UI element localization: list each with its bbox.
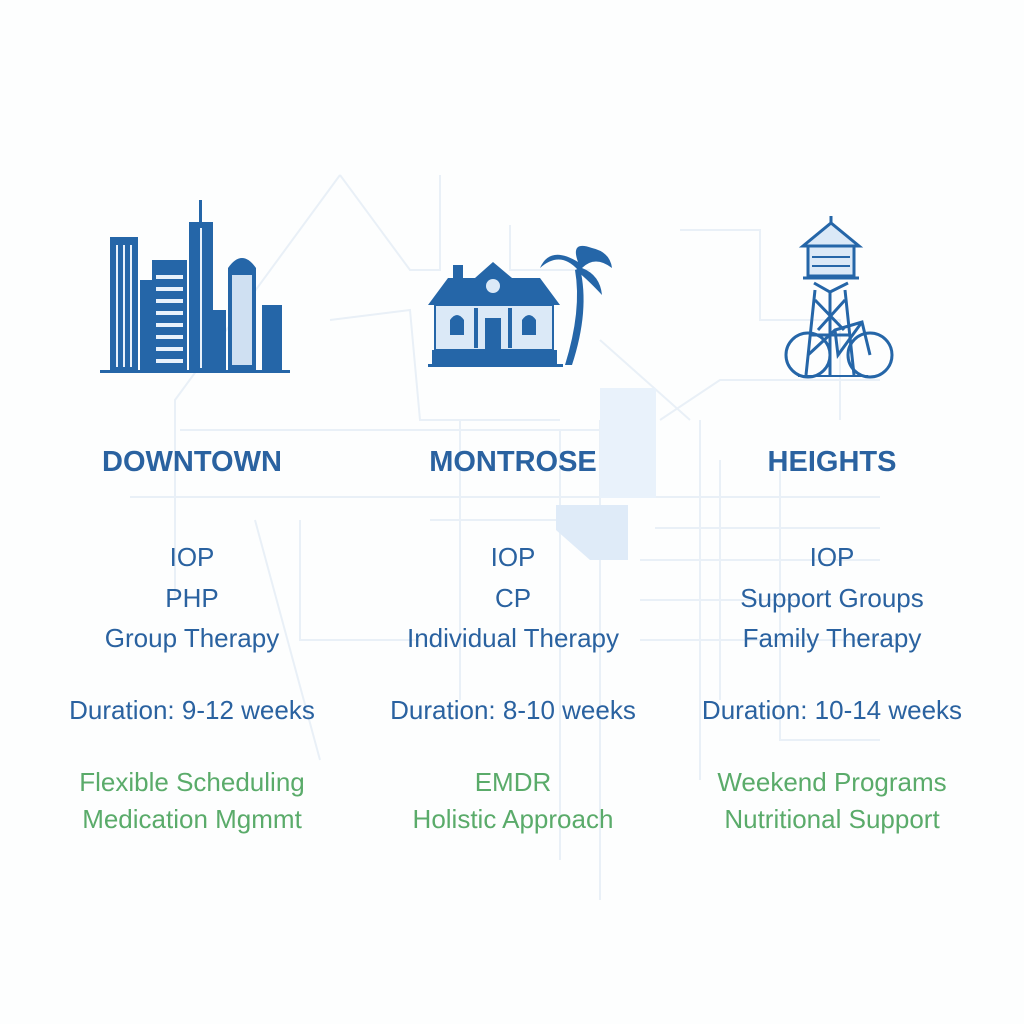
icon: downtown skyline — [100, 200, 290, 373]
column: downtown text: Flexible Scheduling — [79, 767, 305, 797]
column: downtown text: IOP — [170, 542, 214, 572]
column: heights text — [702, 542, 962, 834]
column: heights text: Family Therapy — [743, 623, 921, 653]
column: downtown text: Medication Mgmmt — [82, 804, 303, 834]
headings: HEIGHTS — [768, 446, 896, 478]
column: montrose text: IOP — [491, 542, 535, 572]
column: downtown text: PHP — [165, 583, 219, 613]
column: montrose text — [390, 542, 636, 834]
headings: DOWNTOWN — [102, 446, 282, 478]
column: montrose text: Duration: 8-10 weeks — [390, 695, 636, 725]
column: montrose text: Holistic Approach — [413, 804, 613, 834]
column: heights text: Nutritional Support — [724, 804, 940, 834]
icon: heights water tower with bike — [786, 216, 892, 377]
headings: MONTROSE — [429, 446, 597, 478]
column: downtown text — [69, 542, 315, 834]
column: montrose text: Individual Therapy — [407, 623, 619, 653]
column: downtown text: Group Therapy — [105, 623, 279, 653]
column: downtown text: Duration: 9-12 weeks — [69, 695, 315, 725]
column: heights text: Support Groups — [740, 583, 924, 613]
column: heights text: IOP — [810, 542, 854, 572]
column: heights text: Duration: 10-14 weeks — [702, 695, 962, 725]
column: montrose text: CP — [495, 583, 531, 613]
icon: montrose house with palm — [428, 246, 612, 367]
headings — [102, 446, 896, 478]
column: heights text: Weekend Programs — [717, 767, 947, 797]
column: montrose text: EMDR — [475, 767, 551, 797]
